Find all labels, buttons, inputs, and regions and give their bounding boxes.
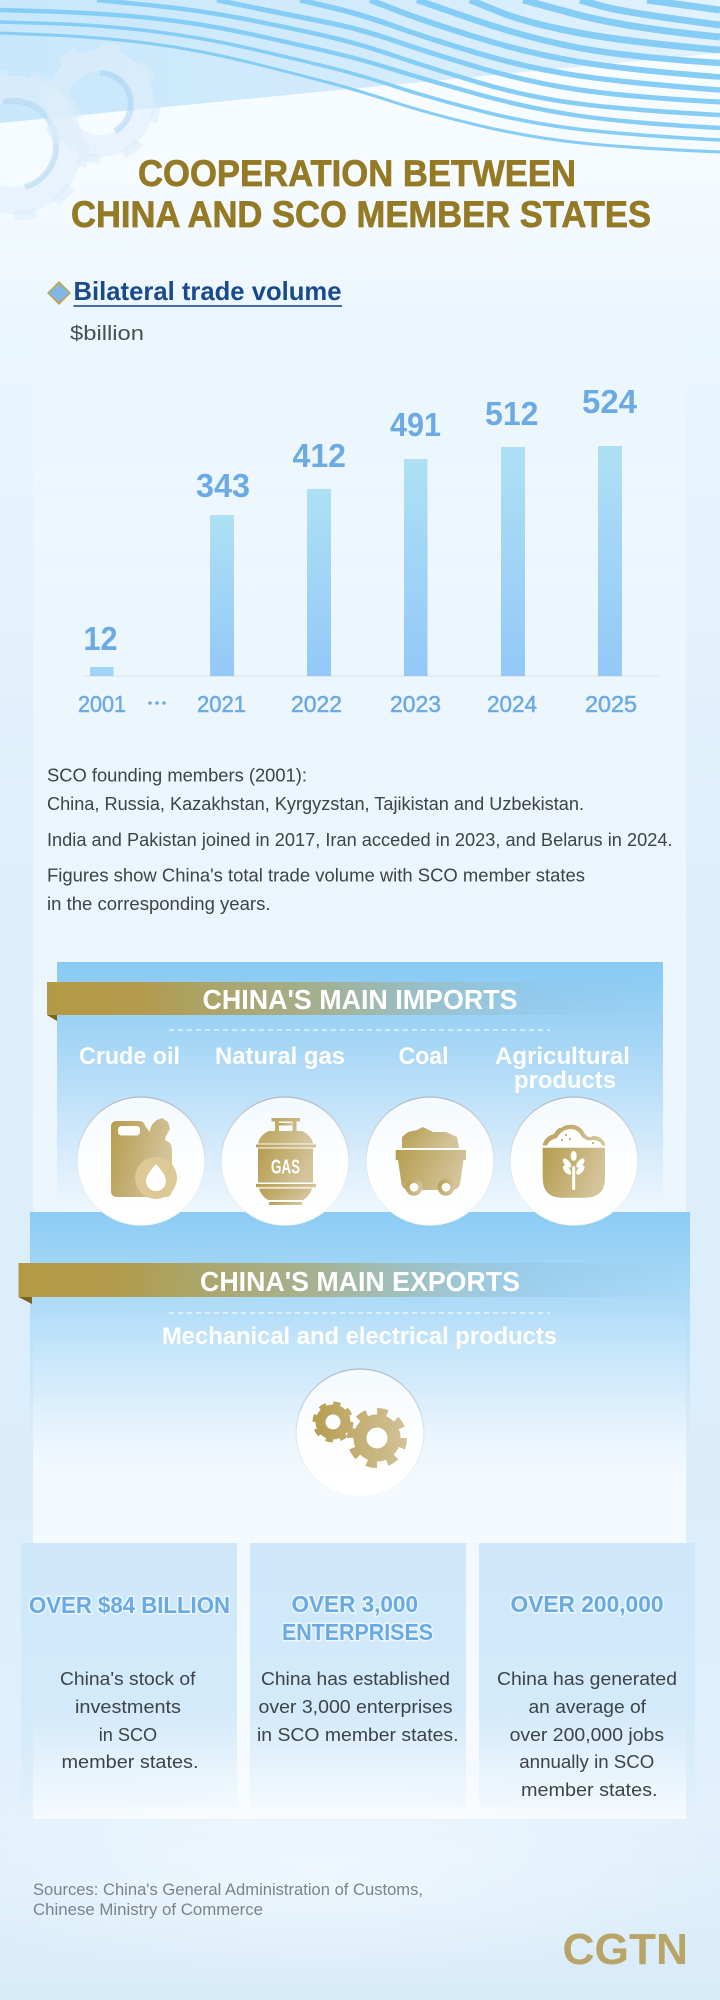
card body: member states. [62,1751,198,1772]
bar 2021: 2021 [197,691,246,717]
card heading: OVER 200,000 [510,1591,664,1617]
notes text block: in the corresponding years. [47,894,270,914]
card body: China's stock of [60,1668,196,1689]
notes text block: Figures show China's total trade volume with SCO member states [47,866,585,886]
bar chart [78,383,659,717]
ribbon heading: imports: CHINA'S MAIN IMPORTS [202,984,518,1015]
logo: CGTN: CGTN [562,1925,688,1974]
ribbon heading: exports: CHINA'S MAIN EXPORTS [200,1266,520,1297]
card: jobs [479,1543,695,1819]
card body: China has established [261,1668,450,1689]
header wave decoration [0,0,720,152]
card body: an average of [528,1696,647,1717]
icon: gears [296,1369,424,1497]
import categories: Crude oil [79,1043,180,1070]
bar 2022: 2022 [291,691,342,717]
panel: china's main exports [18,1212,690,1543]
card: enterprises [250,1543,466,1819]
decorative translucent gears [0,47,156,216]
title: COOPERATION BETWEEN [138,153,576,194]
export category: Mechanical and electrical products [162,1323,557,1350]
card body [497,1668,677,1800]
bar 2001: 12 [84,620,118,657]
bar 2025: 524 [582,383,638,420]
notes text block [47,766,672,914]
bar 2023: 2023 [390,691,441,717]
bar 2021 [196,467,250,717]
card body: in SCO [99,1724,157,1745]
import categories: Coal [398,1043,448,1070]
bar 2024: 2024 [487,691,537,717]
title: CHINA AND SCO MEMBER STATES [71,194,651,235]
panel: china's main imports [47,962,663,1212]
card body: annually in SCO [519,1751,654,1772]
bar 2022 [291,437,346,717]
ellipsis between years [148,701,166,705]
card: investments [21,1543,237,1819]
card body: investments [75,1696,181,1717]
import categories: Natural gas [215,1043,345,1070]
icon: agricultural sack [510,1097,638,1225]
import categories [79,1043,630,1094]
card heading: OVER 3,000 [292,1591,418,1617]
bar 2021: 343 [196,467,250,504]
card body [257,1668,458,1745]
card body: China has generated [497,1668,677,1689]
card heading [282,1591,433,1645]
notes text block: India and Pakistan joined in 2017, Iran acceded in 2023, and Belarus in 2024. [47,830,672,850]
notes text block: SCO founding members (2001): [47,766,307,786]
notes text block: China, Russia, Kazakhstan, Kyrgyzstan, Tajikistan and Uzbekistan. [47,794,584,814]
card body [60,1668,198,1772]
bar 2024 [485,395,538,717]
bar 2023: 491 [390,406,441,443]
card heading: OVER $84 BILLION [29,1592,230,1618]
bar 2023 [390,406,441,717]
bar 2001 [78,620,126,717]
bar 2001: 2001 [78,691,126,717]
card body: over 200,000 jobs [510,1724,664,1745]
ribbon heading: exports [18,1263,680,1304]
unit label: $billion [70,323,144,345]
card heading: ENTERPRISES [282,1619,433,1645]
ribbon heading: imports [47,982,660,1021]
import categories: products [514,1067,616,1094]
card body: in SCO member states. [257,1724,458,1745]
card body: member states. [521,1779,658,1800]
icon: natural gas cylinder [221,1097,349,1225]
sources: Chinese Ministry of Commerce [33,1901,263,1919]
bar 2025 [582,383,638,717]
bar 2022: 412 [292,437,346,474]
bar 2024: 512 [485,395,538,432]
sources: Sources: China's General Administration of Customs, [33,1881,423,1899]
section heading: bilateral trade volume: Bilateral trade volume [74,276,342,306]
title [71,153,651,235]
bar 2025: 2025 [585,691,637,717]
import categories: Agricultural [495,1043,630,1070]
sources [33,1881,423,1919]
icon: coal cart [366,1097,494,1225]
card body: over 3,000 enterprises [258,1696,452,1717]
icon: natural gas cylinder: GAS [271,1156,300,1178]
icon: crude oil can [77,1097,205,1225]
